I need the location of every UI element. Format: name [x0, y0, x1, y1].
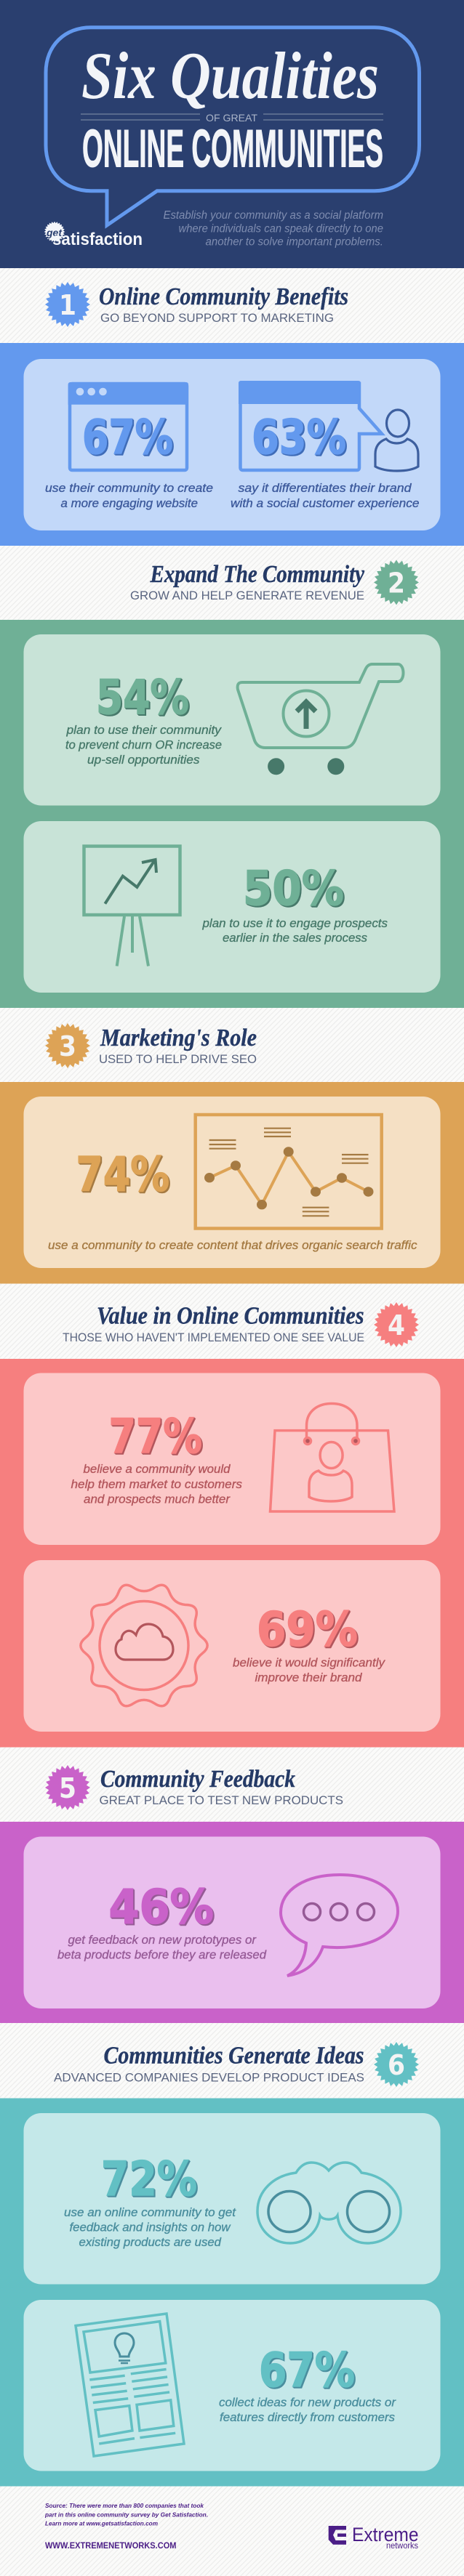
- icon: seal with cloud: [81, 1585, 207, 1706]
- heading 4: Value in Online Communities: [97, 1302, 364, 1330]
- heading 2: Expand The Community: [150, 561, 365, 588]
- badge 1: 1: [59, 289, 76, 321]
- stat: 74%: 74%: [76, 1148, 169, 1202]
- stat: 69%: 69%: [257, 1603, 358, 1657]
- source note: Source: There were more than 800 companies that took: [45, 2502, 204, 2509]
- stat: 72%: 72%: [101, 2152, 197, 2207]
- band 6: [0, 2099, 464, 2487]
- speech bubble outline: [46, 28, 419, 225]
- subheading 3: USED TO HELP DRIVE SEO: [99, 1052, 257, 1066]
- badge 2: [374, 560, 419, 605]
- logo: extreme networks: networks: [386, 2542, 418, 2551]
- stat: 67%: 67%: [259, 2343, 355, 2398]
- icon: shopping bag with person: [271, 1404, 394, 1511]
- panel 1: [23, 359, 441, 530]
- subheading 1: GO BEYOND SUPPORT TO MARKETING: [100, 311, 334, 325]
- caption: 50%: [201, 917, 388, 945]
- source note: [44, 2502, 208, 2527]
- caption: 50%: plan to use it to engage prospects: [201, 917, 388, 930]
- band 5: [0, 1822, 464, 2023]
- caption: 67%: features directly from customers: [220, 2411, 395, 2424]
- intro text: [163, 209, 383, 249]
- source note: Learn more at www.getsatisfaction.com: [45, 2520, 158, 2527]
- badge 5: [45, 1765, 90, 1810]
- band 1: [0, 343, 464, 546]
- section 3: marketing's role: [0, 1023, 464, 1283]
- logo: get satisfaction: get: [46, 227, 63, 238]
- icon: shopping cart: [238, 664, 403, 775]
- section 6: communities generate ideas: [0, 2042, 464, 2487]
- caption: 54%: [65, 724, 223, 767]
- badge 1: [45, 282, 90, 327]
- caption: 77%: [71, 1463, 242, 1506]
- caption: 63%: [231, 482, 419, 510]
- intro text: where individuals can speak directly to one: [179, 222, 383, 235]
- caption: 46%: get feedback on new prototypes or: [68, 1934, 257, 1947]
- intro text: Establish your community as a social platform: [163, 209, 383, 222]
- caption: 54%: to prevent churn OR increase: [65, 738, 222, 751]
- panel 6b: [23, 2300, 441, 2471]
- caption: 67%: a more engaging website: [61, 497, 198, 510]
- caption: 63%: with a social customer experience: [231, 497, 419, 510]
- caption: 46%: beta products before they are released: [57, 1949, 267, 1962]
- subtitle: of great: OF GREAT: [206, 112, 257, 124]
- panel 4b: [23, 1560, 441, 1732]
- icon: presentation board: [84, 846, 180, 966]
- caption: 50%: earlier in the sales process: [223, 932, 367, 945]
- website url: WWW.EXTREMENETWORKS.COM: [45, 2542, 176, 2551]
- caption: 69%: believe it would significantly: [233, 1657, 386, 1670]
- badge 3: [45, 1023, 90, 1068]
- subheading 6: ADVANCED COMPANIES DEVELOP PRODUCT IDEAS: [54, 2071, 364, 2084]
- band 2: [0, 620, 464, 1008]
- icon: browser window: [68, 382, 188, 470]
- stat: 77%: 77%: [109, 1410, 202, 1464]
- icon: browser speech bubble: [239, 381, 382, 470]
- heading 3: Marketing's Role: [100, 1025, 257, 1051]
- section 2: expand the community: [0, 560, 464, 1008]
- stat: 50%: 50%: [243, 862, 344, 916]
- intro text: another to solve important problems.: [205, 235, 383, 249]
- stat: 46%: 46%: [109, 1881, 214, 1934]
- logo: extreme networks: Extreme: [352, 2524, 419, 2545]
- caption: 69%: improve their brand: [255, 1671, 362, 1684]
- panel 3: [23, 1097, 441, 1268]
- footer: [44, 2502, 418, 2551]
- panel 4a: [23, 1373, 441, 1545]
- logo: extreme networks: [329, 2524, 419, 2551]
- subheading 2: GROW AND HELP GENERATE REVENUE: [130, 589, 364, 602]
- icon: newspaper with light bulb: [76, 2314, 184, 2456]
- badge 5: 5: [59, 1772, 76, 1804]
- heading 1: Online Community Benefits: [99, 283, 348, 310]
- panel 2a: [23, 634, 441, 805]
- subheading 5: GREAT PLACE TO TEST NEW PRODUCTS: [99, 1793, 343, 1807]
- header panel: [0, 0, 464, 268]
- band 3: [0, 1082, 464, 1283]
- badge 4: 4: [388, 1309, 405, 1341]
- caption: 72%: existing products are used: [79, 2236, 222, 2249]
- subtitle: of great: [81, 112, 383, 124]
- caption: 67%: use their community to create: [45, 482, 213, 495]
- panel 5: [23, 1837, 441, 2008]
- section 1: online community benefits: [0, 282, 464, 546]
- caption: 77%: believe a community would: [83, 1463, 231, 1476]
- caption: 69%: [233, 1657, 386, 1684]
- caption: 67%: collect ideas for new products or: [219, 2397, 397, 2410]
- heading 6: Communities Generate Ideas: [103, 2042, 364, 2070]
- badge 6: [374, 2042, 419, 2087]
- section 5: community feedback: [0, 1765, 464, 2023]
- stat: 54%: 54%: [96, 671, 189, 725]
- logo: get satisfaction: satisfaction: [52, 230, 143, 249]
- caption: 72%: feedback and insights on how: [70, 2221, 231, 2234]
- caption: 54%: plan to use their community: [65, 724, 223, 737]
- caption: 72%: use an online community to get: [64, 2206, 236, 2219]
- caption: 67%: [219, 2397, 397, 2424]
- caption: 46%: [57, 1934, 267, 1962]
- title: Six Qualities: Six Qualities: [81, 39, 379, 113]
- badge 2: 2: [388, 567, 405, 599]
- icon: speech bubble: [281, 1875, 398, 1976]
- caption: 77%: help them market to customers: [71, 1478, 242, 1491]
- caption: 77%: and prospects much better: [84, 1493, 231, 1506]
- logo: get satisfaction: [44, 222, 143, 249]
- badge 3: 3: [59, 1030, 76, 1062]
- stat: 63%: 63%: [252, 411, 346, 465]
- badge 4: [374, 1302, 419, 1347]
- section 4: value in online communities: [0, 1302, 464, 1747]
- subheading 4: THOSE WHO HAVEN'T IMPLEMENTED ONE SEE VALUE: [63, 1331, 364, 1344]
- caption: 67%: [45, 482, 213, 510]
- line chart: [196, 1115, 382, 1228]
- icon: binoculars: [257, 2163, 401, 2243]
- heading 5: Community Feedback: [100, 1766, 295, 1793]
- band 4: [0, 1359, 464, 1747]
- source note: part in this online community survey by Get Satisfaction.: [44, 2511, 208, 2519]
- badge 6: 6: [388, 2049, 405, 2081]
- icon: person: [375, 410, 418, 471]
- panel 6a: [23, 2113, 441, 2285]
- caption: 54%: up-sell opportunities: [87, 754, 199, 767]
- caption: 74%: use a community to create content that drives organic search traffic: [48, 1239, 417, 1252]
- stat: 67%: 67%: [82, 411, 173, 465]
- caption: 63%: say it differentiates their brand: [239, 482, 412, 495]
- panel 2b: [23, 821, 441, 993]
- caption: 72%: [64, 2206, 236, 2249]
